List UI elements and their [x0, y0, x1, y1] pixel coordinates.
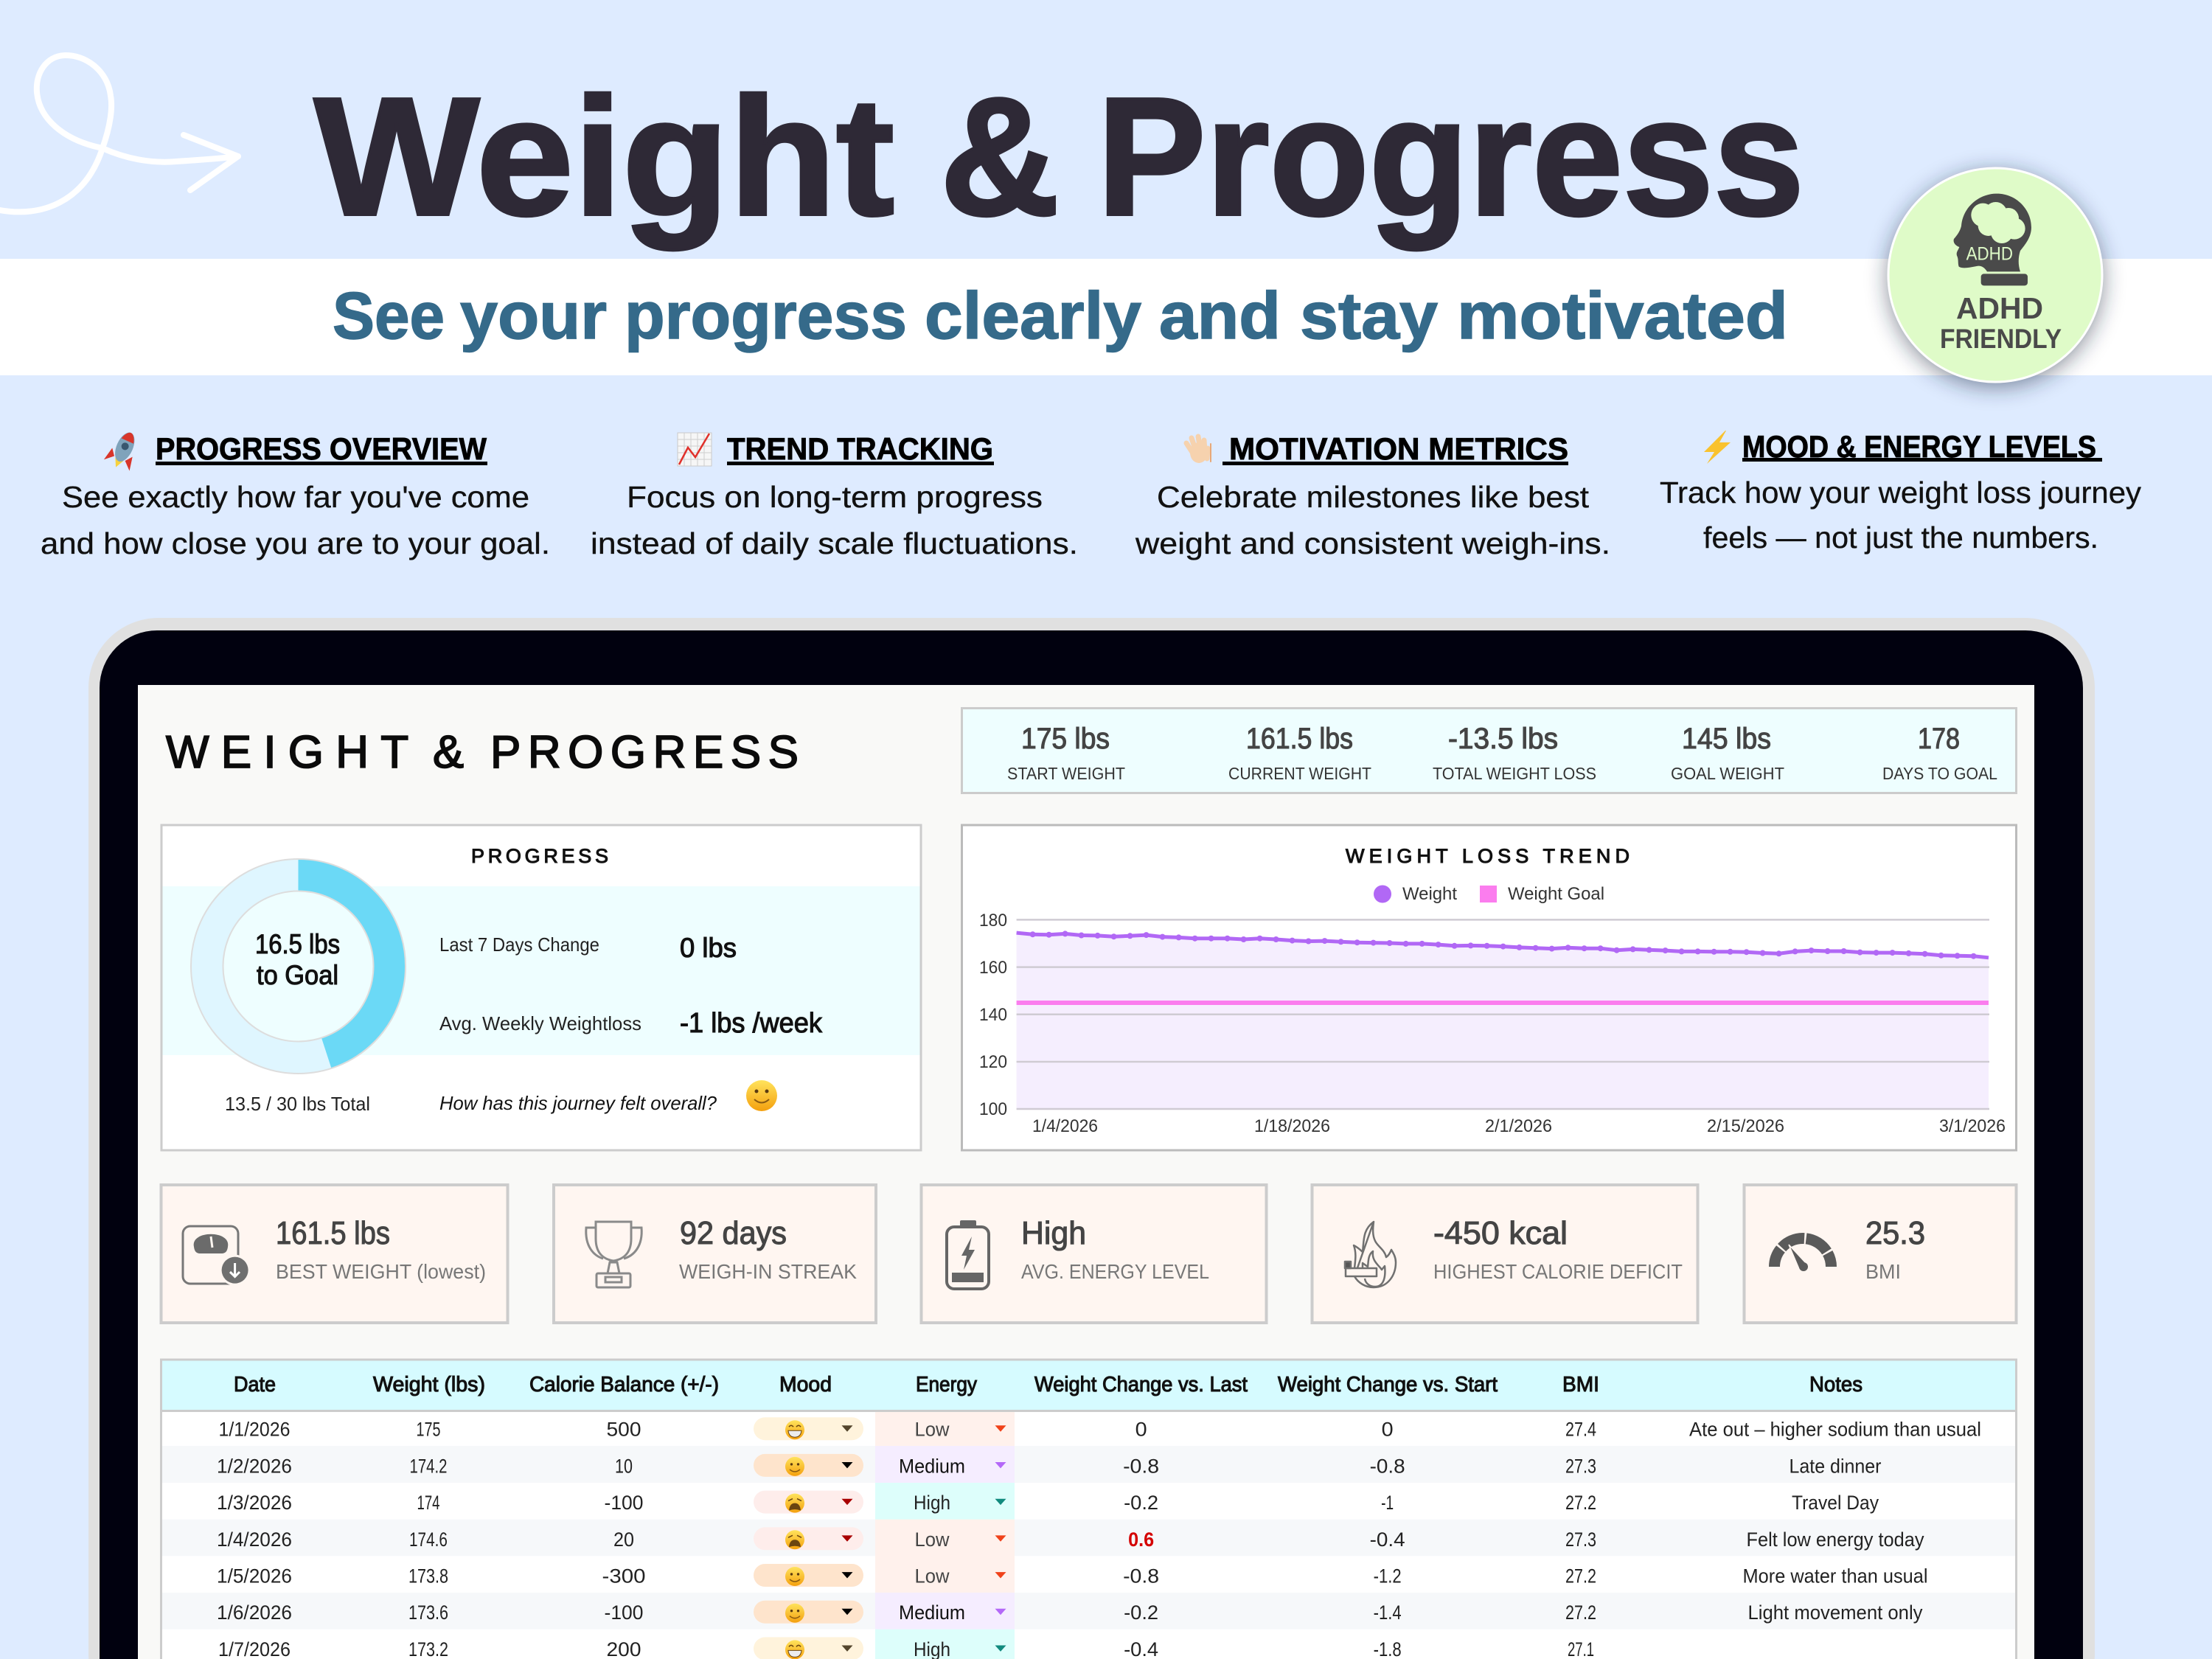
table row: 1/3/2026: -1 — [1381, 1492, 1394, 1514]
decorative swirl arrow — [0, 55, 238, 212]
panel: progress — [161, 825, 921, 1150]
table — [161, 1360, 2016, 1659]
table row: 1/4/2026: Felt low energy today — [1746, 1528, 1924, 1551]
table row: 1/5/2026: More water than usual — [1743, 1565, 1927, 1587]
summary stats bar: -13.5 lbs — [1448, 723, 1558, 755]
table row: 1/1/2026: 1/1/2026 — [218, 1419, 291, 1441]
dashboard heading: WEIGHT — [166, 727, 408, 778]
chart legend: Weight — [1402, 884, 1457, 904]
title: Weight — [314, 63, 894, 251]
table row: 1/4/2026: 174.6 — [409, 1528, 448, 1551]
donut label: to Goal — [257, 960, 338, 990]
feature: progress overview — [41, 427, 550, 560]
table row: 1/1/2026: 27.4 — [1565, 1419, 1596, 1441]
metric card: energy level — [922, 1185, 1267, 1323]
subtitle: and — [1159, 279, 1281, 353]
metric card: energy level: High — [1021, 1215, 1086, 1251]
table header: Mood — [779, 1373, 832, 1397]
badge: ADHD friendly — [1888, 168, 2103, 387]
table row: 1/3/2026: 27.2 — [1565, 1492, 1596, 1514]
badge: ADHD friendly: ADHD — [1956, 291, 2043, 325]
table row: 1/6/2026: -100 — [605, 1601, 643, 1624]
y axis labels — [979, 911, 1007, 1119]
metric card: best weight — [161, 1185, 507, 1323]
table row: 1/3/2026 — [217, 1491, 1879, 1514]
y axis labels: 160 — [979, 958, 1007, 978]
feature: motivation metrics: weight and consistent weigh-ins. — [1135, 526, 1610, 560]
panel: progress: How has this journey felt overall? — [439, 1092, 717, 1114]
table row: 1/4/2026: Low — [914, 1528, 950, 1551]
summary stats bar: START WEIGHT — [1007, 764, 1125, 783]
icon: head with brain — [1954, 194, 2031, 285]
icon: battery — [947, 1220, 989, 1289]
x axis labels: 2/1/2026 — [1485, 1116, 1552, 1136]
feature: trend tracking: TREND TRACKING — [727, 431, 993, 466]
table row: 1/4/2026: 20 — [613, 1528, 634, 1551]
dashboard heading: PROGRESS — [490, 727, 799, 778]
summary stats bar: 145 lbs — [1682, 723, 1771, 755]
summary stats bar — [961, 708, 2016, 793]
title: Progress — [1097, 63, 1804, 251]
x axis labels — [1032, 1116, 2006, 1136]
y axis labels: 120 — [979, 1052, 1007, 1072]
subtitle: clearly — [925, 279, 1141, 353]
feature: progress overview: PROGRESS OVERVIEW — [156, 431, 487, 466]
energy column fills — [875, 1412, 1015, 1659]
subtitle: stay — [1300, 279, 1438, 353]
icon: gauge — [1774, 1238, 1832, 1271]
table row: 1/3/2026: -0.2 — [1124, 1492, 1158, 1514]
table row: 1/6/2026: -1.4 — [1374, 1601, 1402, 1624]
table row: 1/6/2026: -0.2 — [1124, 1601, 1158, 1624]
panel: progress: PROGRESS — [471, 845, 608, 867]
summary stats bar: 178 — [1918, 723, 1960, 755]
table header: Energy — [916, 1373, 977, 1397]
icon: scale — [183, 1226, 251, 1286]
donut label: 16.5 lbs — [255, 929, 340, 959]
table row: 1/6/2026 — [217, 1601, 1923, 1624]
summary stats bar: 175 lbs — [1021, 723, 1110, 755]
table row: 1/2/2026: 1/2/2026 — [217, 1455, 292, 1477]
feature: mood and energy levels: Track how your weight loss journey — [1660, 476, 2142, 509]
icon: chart increasing — [678, 433, 712, 466]
metric card: weigh-in streak: 92 days — [680, 1215, 787, 1251]
metric card: weigh-in streak — [554, 1185, 876, 1323]
table row: 1/3/2026: 1/3/2026 — [217, 1492, 292, 1514]
table row: 1/4/2026: -0.4 — [1370, 1528, 1405, 1551]
metric card: best weight: 161.5 lbs — [276, 1215, 390, 1251]
table row: 1/6/2026: 173.6 — [408, 1601, 448, 1624]
device frame — [88, 618, 2095, 1659]
table row: 1/5/2026: Low — [914, 1565, 950, 1587]
subtitle: your — [460, 279, 607, 353]
table row: 1/5/2026: 173.8 — [408, 1565, 448, 1587]
panel: progress: -1 lbs /week — [680, 1008, 823, 1039]
table row: 1/2/2026: Late dinner — [1789, 1455, 1882, 1477]
badge: ADHD friendly: FRIENDLY — [1940, 324, 2062, 354]
feature: trend tracking — [591, 431, 1078, 560]
table row: 1/3/2026: 174 — [417, 1492, 439, 1514]
metric card: energy level: AVG. ENERGY LEVEL — [1021, 1260, 1209, 1283]
title: & — [940, 63, 1060, 251]
panel: progress: Last 7 Days Change — [439, 933, 599, 956]
x axis labels: 2/15/2026 — [1707, 1116, 1784, 1136]
feature: trend tracking: Focus on long-term progress — [627, 480, 1043, 514]
chart legend: Weight Goal — [1508, 884, 1604, 904]
y axis labels: 100 — [979, 1099, 1007, 1119]
table row: 1/1/2026: 0 — [1382, 1419, 1394, 1441]
table row: 1/3/2026: Travel Day — [1792, 1492, 1879, 1514]
icon: lightning bolt — [1704, 431, 1731, 464]
panel: weight loss trend chart — [961, 825, 2016, 1150]
feature: motivation metrics: Celebrate milestones like best — [1157, 480, 1590, 514]
table row: 1/2/2026 — [217, 1454, 1882, 1477]
table row: 1/5/2026: 1/5/2026 — [217, 1565, 292, 1587]
table row: 1/1/2026 — [218, 1417, 1981, 1441]
summary stats bar: GOAL WEIGHT — [1671, 764, 1784, 783]
table row: 1/4/2026: 27.3 — [1565, 1528, 1596, 1551]
table row: 1/2/2026: -0.8 — [1123, 1455, 1159, 1477]
feature: progress overview: and how close you are to your goal. — [41, 526, 550, 560]
icon: head with brain: ADHD — [1966, 244, 2013, 265]
table row: 1/4/2026: 1/4/2026 — [217, 1528, 292, 1551]
table row: 1/5/2026: 27.2 — [1565, 1565, 1596, 1587]
feature: trend tracking: instead of daily scale fluctuations. — [591, 526, 1078, 560]
panel: progress: 0 lbs — [680, 933, 737, 963]
table row: 1/1/2026: 0 — [1135, 1419, 1147, 1441]
y axis labels: 140 — [979, 1005, 1007, 1025]
table row: 1/2/2026: 27.3 — [1565, 1455, 1596, 1477]
feature: mood and energy levels — [1660, 429, 2142, 554]
table row: 1/2/2026: -0.8 — [1370, 1455, 1405, 1477]
line chart area — [1017, 919, 1989, 1109]
table row: 1/5/2026: -1.2 — [1374, 1565, 1402, 1587]
table header: Weight Change vs. Start — [1278, 1373, 1498, 1397]
table row: 1/2/2026: 174.2 — [410, 1455, 447, 1477]
metric card: calorie deficit — [1312, 1185, 1697, 1323]
table header: Date — [234, 1373, 276, 1397]
icon: clapping hands — [1186, 437, 1211, 463]
table header: Weight Change vs. Last — [1034, 1373, 1248, 1397]
table row: 1/6/2026: 1/6/2026 — [217, 1601, 292, 1624]
feature: motivation metrics: MOTIVATION METRICS — [1229, 431, 1568, 466]
panel: progress: Avg. Weekly Weightloss — [439, 1012, 641, 1034]
table row: 1/1/2026: 175 — [416, 1419, 441, 1441]
table row: 1/6/2026: Medium — [899, 1601, 965, 1624]
table row: 1/1/2026: 500 — [606, 1419, 641, 1441]
icon: smiley — [746, 1080, 777, 1111]
x axis labels: 1/4/2026 — [1032, 1116, 1098, 1136]
feature: motivation metrics — [1135, 431, 1610, 560]
metric card: weigh-in streak: WEIGH-IN STREAK — [679, 1260, 857, 1283]
table row: 1/6/2026: 27.2 — [1565, 1601, 1596, 1624]
table row: 1/1/2026: Ate out – higher sodium than usual — [1689, 1419, 1981, 1441]
icon: trophy — [586, 1222, 641, 1287]
table header: BMI — [1562, 1373, 1599, 1397]
table row: 1/5/2026: -0.8 — [1123, 1565, 1159, 1587]
feature: mood and energy levels: MOOD & ENERGY LEVELS — [1742, 429, 2096, 464]
metric card: BMI — [1745, 1185, 2016, 1323]
metric card: BMI: BMI — [1865, 1260, 1901, 1283]
summary stats bar: 161.5 lbs — [1246, 723, 1353, 755]
row stripes — [162, 1446, 2015, 1630]
chart legend — [1374, 884, 1604, 904]
icon: rocket — [103, 427, 144, 473]
feature: progress overview: See exactly how far you've come — [62, 480, 529, 514]
table row: 1/4/2026 — [217, 1527, 1924, 1551]
table row: 1/5/2026: -300 — [602, 1565, 646, 1587]
metric card: calorie deficit: -450 kcal — [1433, 1215, 1568, 1251]
table row: 1/3/2026: High — [914, 1492, 950, 1514]
y axis labels: 180 — [979, 911, 1007, 931]
summary stats bar: TOTAL WEIGHT LOSS — [1433, 764, 1596, 783]
table row: 1/6/2026: Light movement only — [1747, 1601, 1923, 1624]
table header: Weight (lbs) — [373, 1373, 485, 1397]
feature: mood and energy levels: feels — not just the numbers. — [1703, 521, 2098, 554]
table header — [162, 1361, 2015, 1412]
summary stats bar: DAYS TO GOAL — [1882, 764, 1997, 783]
subtitle: See — [333, 279, 445, 353]
panel: progress: 13.5 / 30 lbs Total — [225, 1093, 370, 1115]
table row: 1/2/2026: Medium — [899, 1455, 965, 1477]
table row: 1/3/2026: -100 — [605, 1492, 643, 1514]
table header: Calorie Balance (+/-) — [529, 1373, 719, 1397]
table row: 1/7/2026 — [218, 1637, 1594, 1659]
table header: Notes — [1809, 1373, 1863, 1397]
dashboard heading: & — [433, 727, 464, 778]
metric card: best weight: BEST WEIGHT (lowest) — [276, 1260, 486, 1283]
table row: 1/4/2026: 0.6 — [1128, 1528, 1154, 1551]
x axis labels: 1/18/2026 — [1254, 1116, 1330, 1136]
table row: 1/1/2026: Low — [914, 1419, 950, 1441]
icon: flame — [1345, 1222, 1396, 1287]
metric card: BMI: 25.3 — [1865, 1215, 1925, 1251]
donut label — [255, 929, 340, 990]
table row: 1/5/2026 — [217, 1564, 1927, 1587]
metric card: calorie deficit: HIGHEST CALORIE DEFICIT — [1433, 1260, 1683, 1283]
table row: 1/2/2026: 10 — [615, 1455, 633, 1477]
subtitle: progress — [625, 279, 907, 353]
donut chart — [191, 859, 406, 1074]
subtitle: motivated — [1457, 279, 1788, 353]
summary stats bar: CURRENT WEIGHT — [1228, 764, 1371, 783]
panel: weight loss trend chart: WEIGHT LOSS TREND — [1346, 845, 1630, 867]
x axis labels: 3/1/2026 — [1939, 1116, 2006, 1136]
